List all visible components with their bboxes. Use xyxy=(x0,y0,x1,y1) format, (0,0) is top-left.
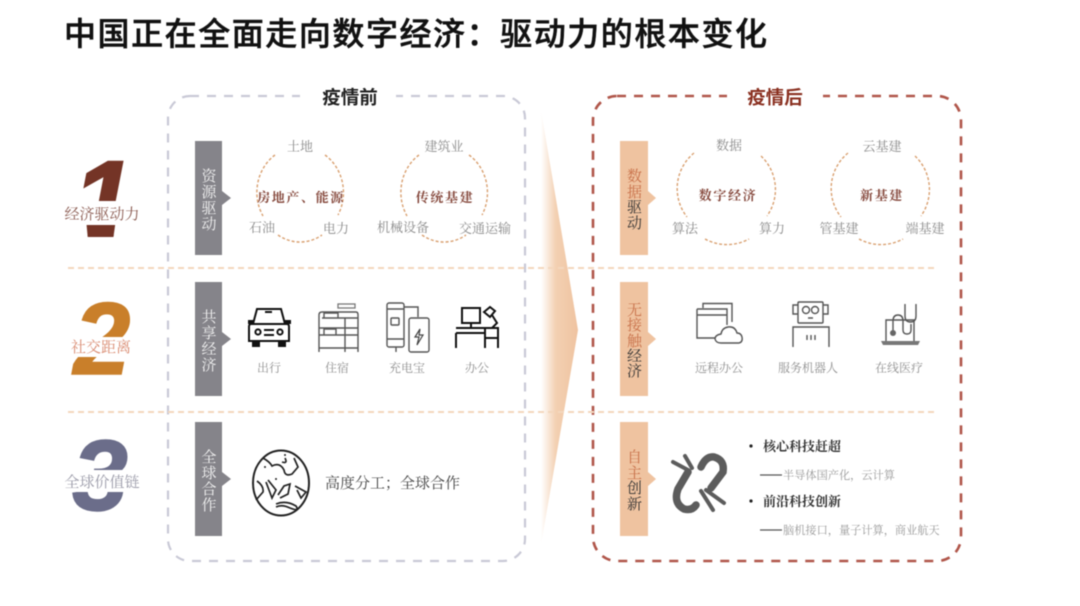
bar: global cooperation: 全 xyxy=(201,449,217,466)
driver 3: global value chain: 3 xyxy=(72,420,128,532)
bar: sharing economy: 享 xyxy=(201,325,217,342)
icon: online medical xyxy=(875,304,923,375)
diagram: new infrastructure xyxy=(819,139,945,245)
big transition arrow xyxy=(541,110,578,545)
bar: contactless economy: 接 xyxy=(627,317,642,334)
driver 2: social distancing: 2 xyxy=(72,282,130,396)
driver 1: economic drivers: 经济驱动力 xyxy=(64,206,140,223)
driver 2: social distancing: 社交距离 xyxy=(71,339,131,356)
bar: contactless economy: 济 xyxy=(627,363,642,380)
bar: independent innovation xyxy=(620,422,656,536)
bar: resource driven: 源 xyxy=(201,184,217,201)
diagram: traditional infrastructure xyxy=(377,139,511,242)
icon: power bank xyxy=(387,303,429,375)
diagram: real estate and energy: 房地产、能源 xyxy=(257,190,345,205)
driver 3: global value chain xyxy=(60,420,150,532)
diagram: new infrastructure: 新基建 xyxy=(860,188,904,203)
diagram: digital economy: 算法 xyxy=(672,221,699,236)
panel: after the pandemic xyxy=(593,87,961,561)
icon: office desk xyxy=(456,307,498,375)
icon: remote office xyxy=(695,304,743,375)
label: 服务机器人 xyxy=(778,360,838,375)
label: 充电宝 xyxy=(389,360,425,375)
icon: globe xyxy=(253,450,309,516)
diagram: traditional infrastructure: 传统基建 xyxy=(416,190,474,205)
diagram: real estate and energy xyxy=(249,139,349,242)
driver 1: economic drivers xyxy=(64,160,138,238)
diagram: traditional infrastructure: 建筑业 xyxy=(424,139,464,154)
text: core technology catch-up xyxy=(749,439,895,482)
bar: data driven: 据 xyxy=(627,183,642,201)
label: 在线医疗 xyxy=(875,360,923,375)
driver 1: economic drivers: 1 xyxy=(73,138,133,259)
diagram: digital economy: 数据 xyxy=(716,138,742,153)
driver 3: global value chain: 全球价值链 xyxy=(64,473,140,491)
bar: contactless economy: 无 xyxy=(627,302,642,319)
bar: global cooperation xyxy=(195,422,231,536)
text: frontier technology innovation xyxy=(749,494,940,537)
diagram: digital economy: 数字经济 xyxy=(699,188,757,203)
bar: resource driven xyxy=(195,141,231,255)
icon: service robot xyxy=(778,302,838,375)
icon: broken chain link xyxy=(673,456,724,510)
driver 2: social distancing xyxy=(60,282,145,396)
bar: sharing economy: 济 xyxy=(201,357,217,374)
bar: resource driven: 资 xyxy=(201,168,217,185)
bar: contactless economy: 经 xyxy=(627,348,642,365)
bar: sharing economy: 经 xyxy=(201,341,217,358)
panel: before the pandemic xyxy=(168,87,525,561)
text: frontier technology innovation: 脑机接口，量子计算，商业航天 xyxy=(783,523,940,537)
diagram: digital economy: 算力 xyxy=(759,221,785,236)
heading: after: 疫情后 xyxy=(747,87,803,108)
bar: global cooperation: 作 xyxy=(201,497,217,514)
bar: independent innovation: 主 xyxy=(627,465,642,482)
icon: bunk bed xyxy=(319,304,358,375)
text: core technology catch-up: 半导体国产化，云计算 xyxy=(783,468,895,482)
diagram: traditional infrastructure: 交通运输 xyxy=(459,221,511,236)
bar: independent innovation: 创 xyxy=(627,480,642,497)
label: 出行 xyxy=(257,360,281,375)
heading: before: 疫情前 xyxy=(322,87,378,108)
bar: data driven xyxy=(620,141,656,255)
diagram: digital economy xyxy=(672,138,785,245)
diagram: real estate and energy: 电力 xyxy=(323,221,349,236)
bar: global cooperation: 合 xyxy=(201,481,217,498)
bar: sharing economy xyxy=(195,282,231,396)
diagram: real estate and energy: 石油 xyxy=(249,220,275,235)
bar: data driven: 驱 xyxy=(627,199,642,216)
label: 远程办公 xyxy=(695,360,743,375)
icon: car xyxy=(248,309,291,375)
label: 住宿 xyxy=(325,360,349,375)
bar: independent innovation: 自 xyxy=(627,449,642,466)
text: high division of labour: 高度分工；全球合作 xyxy=(325,474,460,492)
bar: data driven: 动 xyxy=(627,215,642,232)
bar: data driven: 数 xyxy=(627,168,642,185)
label: 办公 xyxy=(465,360,489,375)
bar: contactless economy xyxy=(620,282,656,396)
text: frontier technology innovation: 前沿科技创新 xyxy=(763,494,841,509)
bar: contactless economy: 触 xyxy=(627,333,643,350)
bar: independent innovation: 新 xyxy=(627,496,642,513)
diagram: new infrastructure: 管基建 xyxy=(819,221,859,236)
bar: global cooperation: 球 xyxy=(201,465,217,482)
bar: resource driven: 动 xyxy=(201,216,217,233)
title: 中国正在全面走向数字经济：驱动力的根本变化 xyxy=(64,16,769,52)
text: core technology catch-up: 核心科技赶超 xyxy=(763,439,841,454)
bar: resource driven: 驱 xyxy=(201,200,217,217)
diagram: new infrastructure: 端基建 xyxy=(905,221,945,236)
diagram: new infrastructure: 云基建 xyxy=(862,139,902,154)
diagram: real estate and energy: 土地 xyxy=(287,139,313,154)
diagram: traditional infrastructure: 机械设备 xyxy=(377,220,429,235)
bar: sharing economy: 共 xyxy=(201,309,217,326)
